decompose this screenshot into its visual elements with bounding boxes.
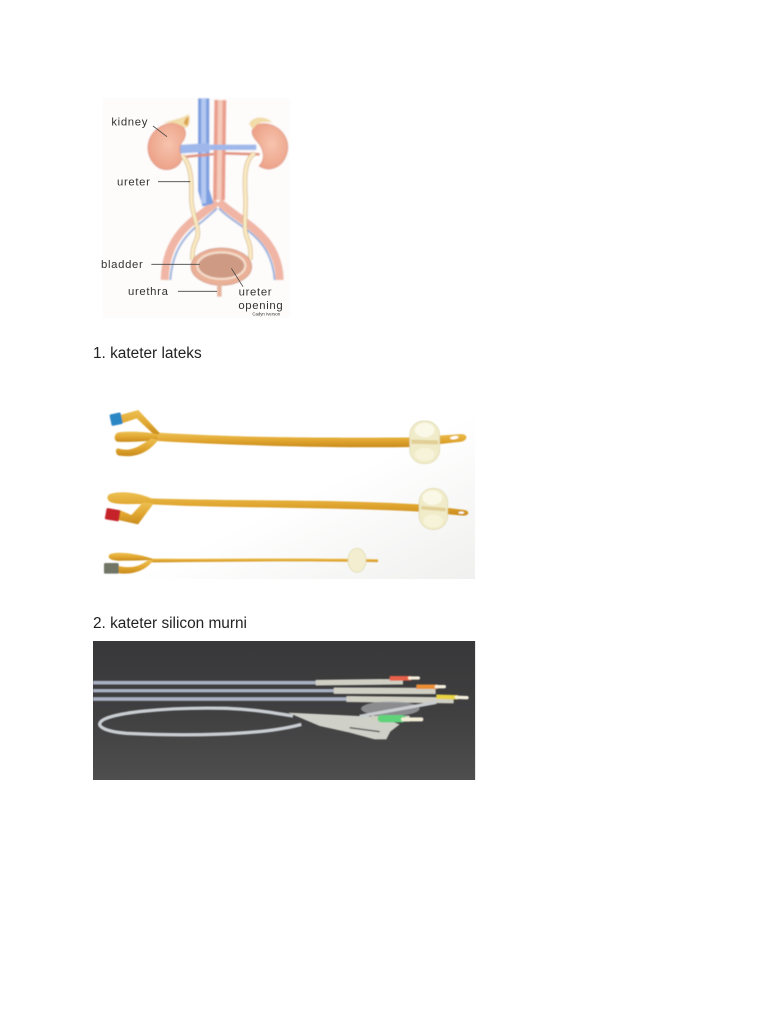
catheter funnel: [288, 713, 400, 739]
diagram labels: opening: [238, 300, 283, 312]
looped catheter: [100, 708, 301, 735]
right ureter: [245, 153, 255, 260]
straight catheter tubes: [93, 683, 348, 699]
right kidney: [252, 124, 288, 169]
photo border: [475, 641, 476, 780]
diagram labels: ureter: [117, 177, 151, 189]
catheter tips: [316, 678, 467, 700]
diagram labels: bladder: [101, 259, 143, 271]
catheter 3: [104, 553, 378, 574]
silicone catheter photo: [93, 641, 476, 780]
diagram labels: Cadyn Iverson: [252, 312, 281, 317]
urethra: [212, 283, 226, 297]
bladder: [191, 248, 252, 285]
right iliac artery and vein: [219, 202, 280, 280]
diagram labels: [101, 117, 283, 317]
left kidney: [148, 123, 185, 170]
diagram labels: kidney: [111, 117, 148, 129]
catheter 2: [105, 492, 468, 524]
balloon 3: [348, 548, 366, 572]
balloon 2: [419, 488, 448, 530]
right adrenal gland: [249, 118, 272, 129]
left ureter: [182, 156, 198, 260]
diagram labels: ureter: [239, 287, 272, 299]
left adrenal gland: [162, 114, 190, 128]
left iliac artery and vein: [165, 202, 217, 280]
vena cava: [204, 98, 208, 205]
renal vessels: [178, 147, 210, 149]
leader lines: [151, 126, 243, 291]
diagram labels: urethra: [128, 286, 169, 298]
urinary system diagram: [101, 98, 290, 317]
balloon: [361, 701, 420, 716]
aorta: [219, 100, 220, 200]
green tip: [371, 710, 410, 728]
catheter 1: [109, 410, 466, 456]
latex catheter photo: [103, 410, 475, 579]
balloon 1: [410, 421, 440, 464]
caption 1: 1. kateter lateks: [93, 345, 202, 362]
caption 2: 2. kateter silicon murni: [93, 615, 247, 632]
